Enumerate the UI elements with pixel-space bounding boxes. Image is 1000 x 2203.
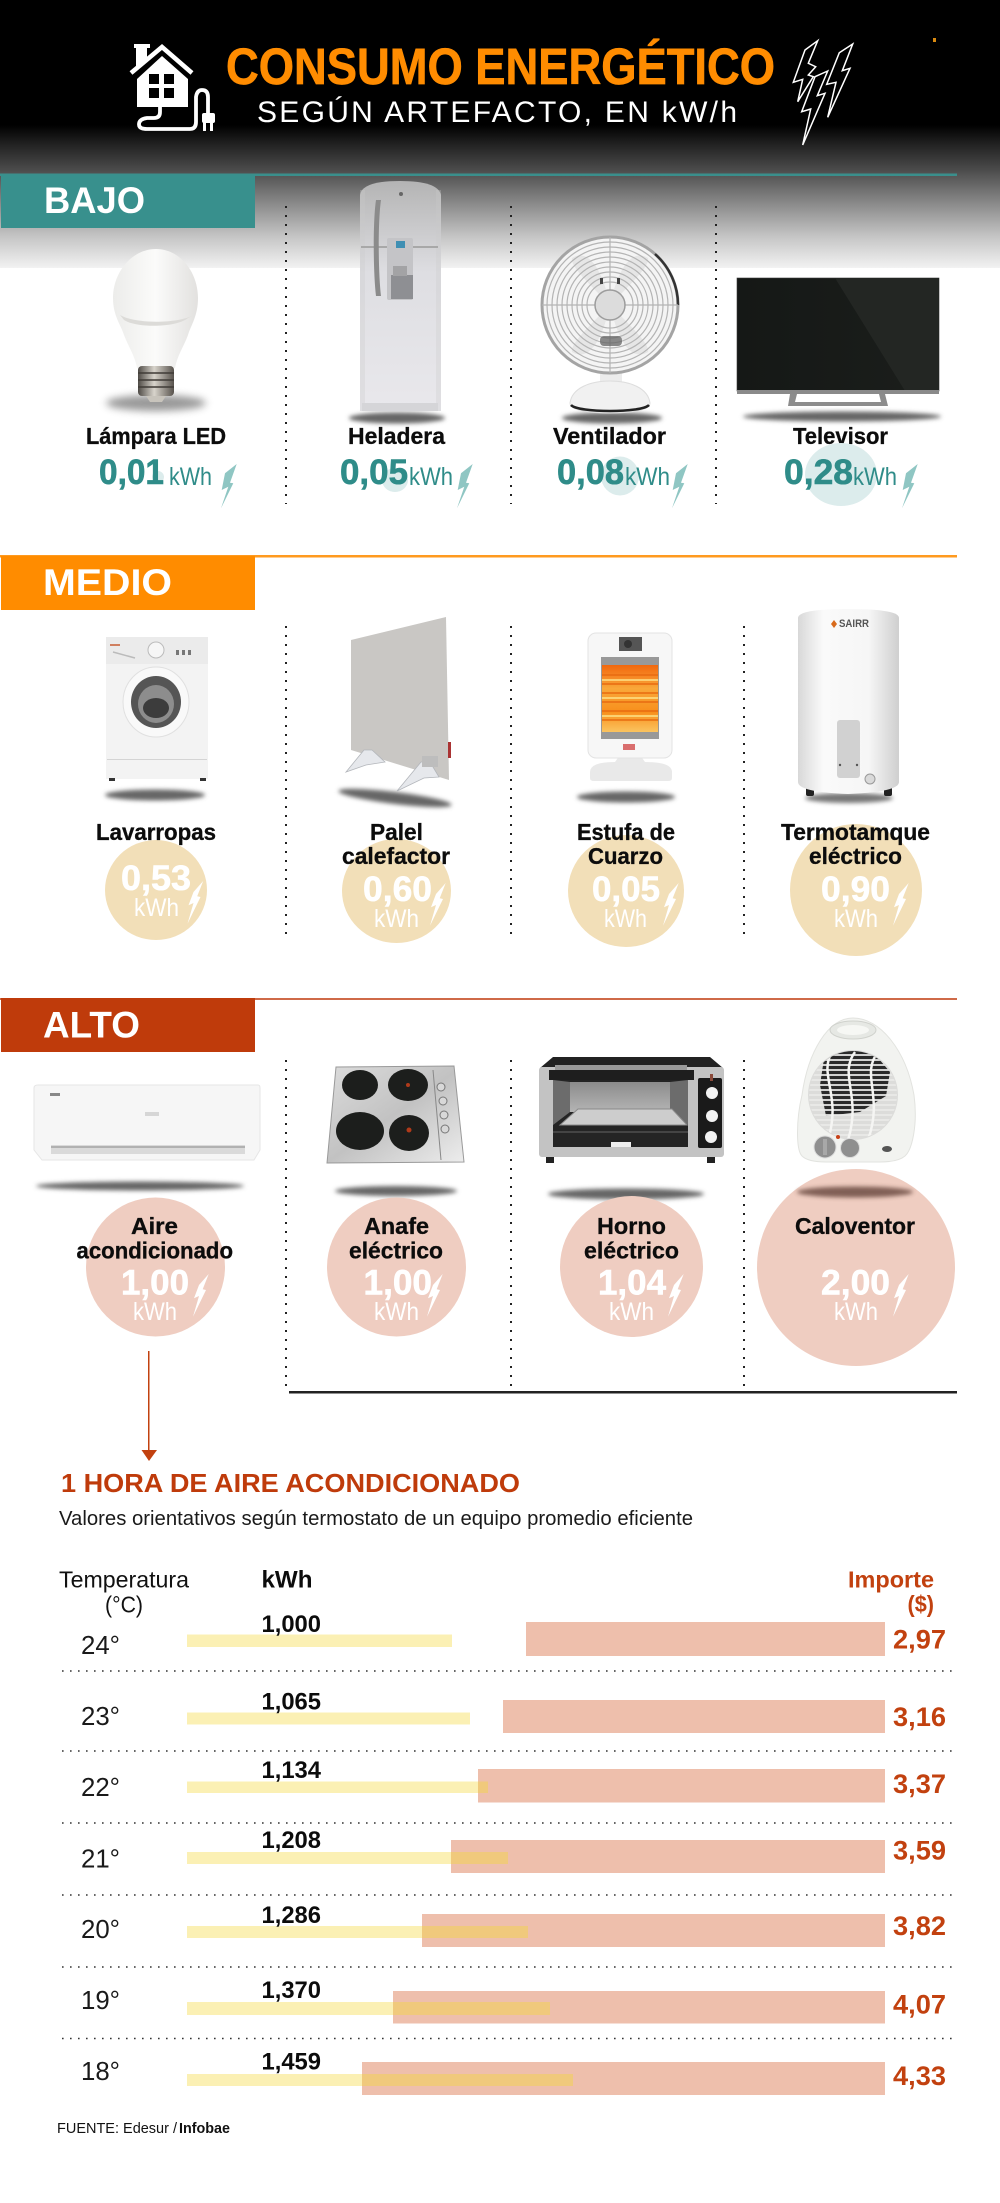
row 21 degrees: 1,208 [262,1827,321,1854]
value: 1,00 [121,1264,189,1302]
icon: bolt [902,464,918,508]
row 20 degrees: 3,82 [893,1911,946,1941]
column header: importe: ($) [908,1591,934,1617]
label: Aire [131,1213,178,1239]
label line 2: eléctrico [349,1238,443,1264]
source: Infobae [179,2120,230,2137]
value: 0,05 [340,453,408,492]
icon: bolt [193,1274,209,1317]
circle scale [601,456,639,496]
value: 0,01 [99,453,164,492]
item: lavarropas [96,637,216,940]
column header: temperatura: (°C) [105,1592,143,1618]
icon: water heater [798,609,899,803]
circle scale [105,840,207,940]
panel: consumo bajo [0,174,957,508]
row 23 degrees [81,1688,946,1733]
row dividers [62,1671,955,2038]
circle scale [152,471,164,483]
circle scale [790,824,922,956]
icon: air conditioner [34,1085,260,1190]
icon: bolt [663,883,679,926]
icon: bolt [457,464,473,508]
unit: kWh [409,463,453,491]
unit: kWh [374,1298,419,1326]
icon: bolt [893,1274,909,1317]
row 19 degrees: 1,370 [262,1977,321,2004]
unit: kWh [625,463,670,491]
circle scale [560,1196,703,1337]
column header: temperatura [59,1566,189,1618]
item: heladera [340,181,473,508]
value: 1,00 [364,1264,432,1302]
icon: panel heater [338,617,452,811]
item: caloventor [757,1018,955,1366]
item: ventilador [542,237,688,508]
row 19 degrees: 19° [81,1985,120,2015]
label line 2: eléctrico [584,1238,679,1264]
row 23 degrees: 3,16 [893,1702,946,1732]
title: CONSUMO ENERGÉTICO [226,38,775,95]
unit: kWh [834,1298,878,1326]
row 20 degrees: 1,286 [262,1902,321,1929]
circle scale [568,835,684,947]
circle scale [382,468,408,492]
row 24 degrees: 24° [81,1630,120,1660]
subtitle: SEGÚN ARTEFACTO, EN kW/h [257,96,737,129]
value: 0,53 [121,859,191,898]
unit: kWh [374,905,419,933]
row 22 degrees: 22° [81,1772,120,1802]
label: Lavarropas [96,819,216,845]
table heading: 1 HORA DE AIRE ACONDICIONADO [61,1468,520,1498]
row 20 degrees [81,1902,946,1947]
column header: importe [848,1566,934,1617]
column header: temperatura: Temperatura [59,1566,189,1592]
icon: quartz heater [577,633,675,802]
panel: consumo medio [0,555,957,956]
value: 0,05 [592,870,660,909]
row 21 degrees [81,1827,946,1874]
section heading: BAJO: BAJO [44,180,145,221]
icon: bolt [427,1274,443,1317]
section heading: MEDIO: MEDIO [43,562,172,603]
chart: kWh e importe por temperatura [59,1566,955,2095]
icon: bolt [430,883,446,926]
row 21 degrees: 3,59 [893,1836,946,1866]
value: 0,08 [557,453,624,492]
column header: importe: Importe [848,1566,934,1592]
shadow over circle [797,1186,913,1198]
row 18 degrees: 4,33 [893,2061,946,2091]
row 22 degrees [81,1757,946,1802]
label: Televisor [793,423,888,449]
row 18 degrees [81,2048,946,2095]
row 24 degrees: 2,97 [893,1624,946,1654]
section heading: ALTO: ALTO [43,1004,140,1046]
icon: bolt [893,883,909,926]
item: lámpara LED [86,249,237,508]
value: 0,90 [821,870,890,909]
row 20 degrees: 20° [81,1914,120,1944]
table subheading: Valores orientativos según termostato de un equipo promedio eficiente [59,1508,693,1530]
label: Termotamque [781,819,930,845]
label line 2: calefactor [342,843,450,869]
circle scale [86,1198,225,1336]
label line 2: acondicionado [76,1238,233,1264]
icon: bolt [672,464,688,508]
value: 1,04 [598,1264,667,1302]
unit: kWh [853,463,897,491]
unit: kWh [133,1298,177,1326]
item: termotanque [781,609,930,956]
unit: kWh [169,463,212,491]
icon: bulb [106,249,206,411]
circle scale [757,1169,955,1366]
row 18 degrees: 1,459 [262,2048,321,2076]
item: panel calefactor [338,617,452,943]
icon: water heater: SAIRR [839,618,869,630]
small orange dot [933,38,936,42]
circle scale [805,443,877,506]
panel: consumo alto [0,998,957,1394]
label: Horno [597,1213,666,1239]
section heading: ALTO [0,998,957,1052]
source: FUENTE: Edesur / [57,2120,178,2137]
icon: fan heater [798,1018,915,1162]
unit: kWh [609,1298,654,1326]
section heading: BAJO [0,174,957,228]
label: Caloventor [795,1213,915,1239]
row 22 degrees: 1,134 [262,1757,322,1784]
value: 0,28 [784,453,853,492]
unit: kWh [604,905,647,933]
unit: kWh [134,894,179,922]
section heading: MEDIO [0,555,957,610]
icon: bolt [188,881,203,924]
label: Anafe [364,1213,429,1239]
label: Heladera [348,423,445,449]
item: aire acondicionado [34,1085,260,1336]
row 23 degrees: 1,065 [262,1688,321,1716]
icon: bolt [668,1274,684,1317]
circle scale [327,1198,466,1336]
label: Estufa de [577,819,675,845]
item: horno eléctrico [539,1057,724,1337]
item: televisor [737,278,941,508]
icon: TV [737,278,941,422]
row 18 degrees: 18° [81,2056,120,2086]
value: 2,00 [821,1264,890,1302]
icon: fan [542,237,678,424]
circle scale [342,839,451,943]
label line 2: Cuarzo [588,843,663,869]
icon: electric hob [327,1066,464,1196]
row 24 degrees [81,1611,946,1660]
column header: kWh: kWh [262,1566,312,1594]
icon: electric oven [539,1057,724,1200]
label line 2: eléctrico [809,843,902,869]
baseline rule [289,1391,957,1394]
icon: fridge [349,181,445,424]
arrow from aire acondicionado to table [142,1351,157,1461]
label: Lámpara LED [86,423,226,449]
row 19 degrees: 4,07 [893,1990,946,2020]
item: anafe eléctrico [327,1066,466,1336]
row 24 degrees: 1,000 [262,1611,321,1638]
row 22 degrees: 3,37 [893,1769,946,1799]
icon: bolt [221,464,237,508]
item: estufa de cuarzo [568,633,684,947]
icon: house with plug [131,44,215,131]
icon: washer [105,637,208,800]
label: Ventilador [553,423,666,449]
unit: kWh [834,905,878,933]
icon: lightning bolts [793,41,853,145]
label: Palel [370,819,423,845]
row 23 degrees: 23° [81,1701,120,1731]
row 19 degrees [81,1977,946,2024]
value: 0,60 [363,870,432,909]
header band with gradient [0,0,1000,268]
row 21 degrees: 21° [81,1844,120,1874]
